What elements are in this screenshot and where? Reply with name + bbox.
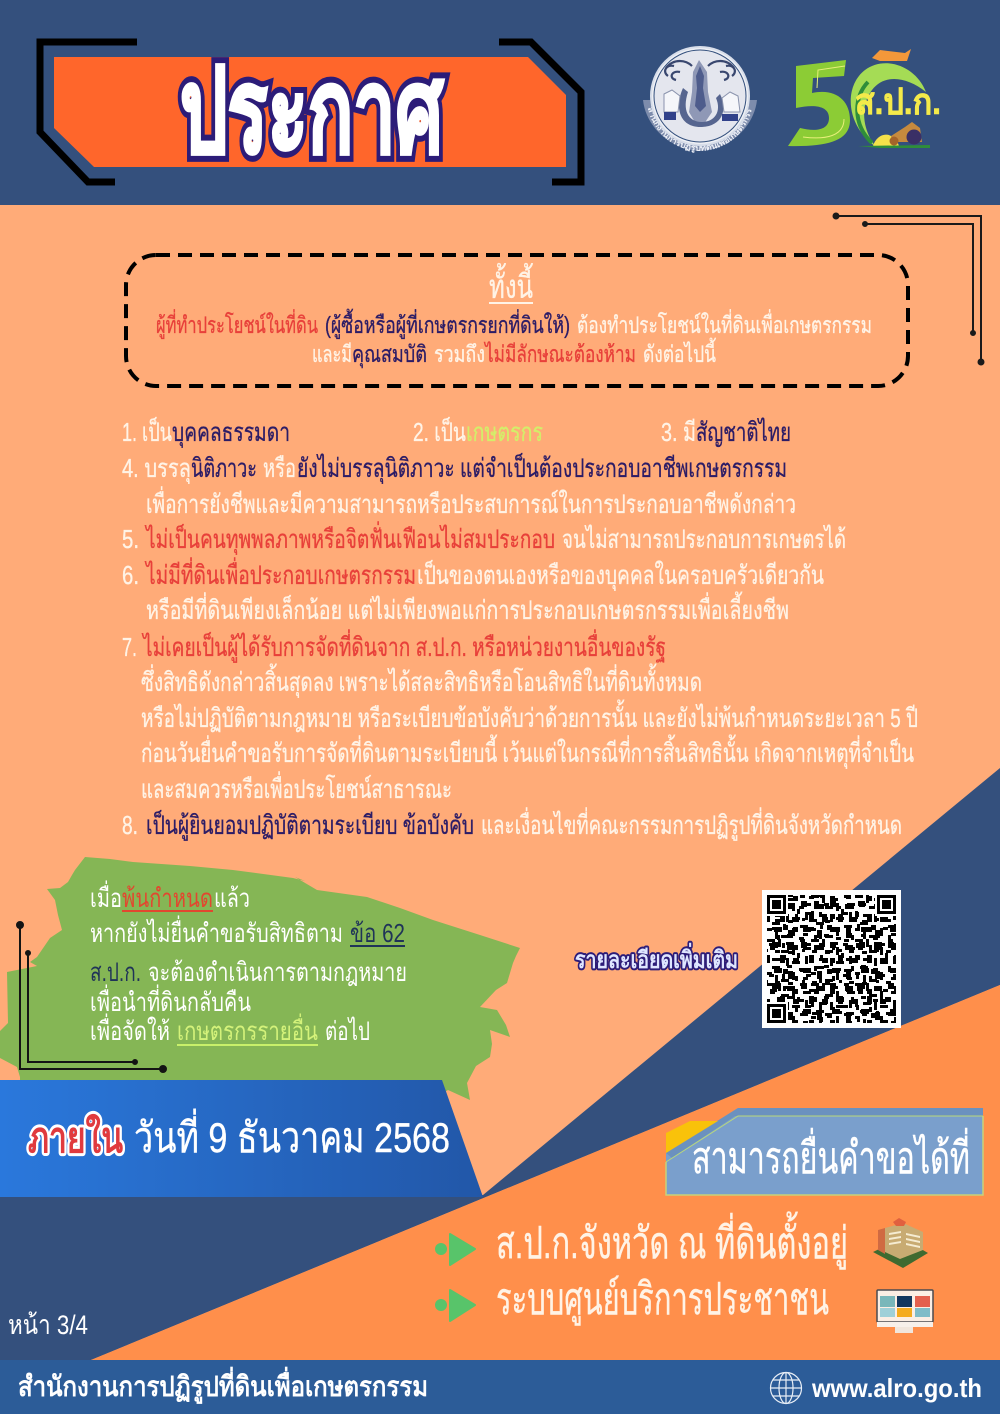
note line 3: จะต้องดำเนินการตามกฎหมาย — [148, 957, 407, 987]
note line 3: ส.ป.ก. — [90, 957, 141, 987]
heading: ทั้งนี้ — [489, 263, 534, 305]
title plate — [54, 57, 566, 167]
sun — [873, 135, 899, 146]
label: more details: รายละเอียดเพิ่มเติม — [575, 942, 738, 974]
panel: green brush note — [0, 857, 520, 1100]
note line 4: เพื่อนำที่ดินกลับคืน — [90, 984, 251, 1017]
tractor — [891, 122, 922, 142]
agency abbreviation: ส.ป.ก. — [855, 81, 941, 122]
grass — [858, 145, 930, 148]
decoration: corner lines top right — [833, 213, 984, 365]
notice line 1 — [156, 309, 872, 339]
crescent zero shade — [857, 82, 872, 143]
title bracket left — [40, 42, 137, 182]
note line 2: หากยังไม่ยื่นคำขอรับสิทธิตาม — [90, 915, 343, 948]
items 1 to 3: สัญชาติไทย — [696, 417, 791, 447]
deadline keyword: ภายใน — [28, 1113, 123, 1161]
item 5: จนไม่สามารถประกอบการเกษตรได้ — [562, 524, 846, 554]
item 6 — [122, 557, 824, 625]
finder squares — [765, 893, 788, 916]
item 7: และสมควรหรือเพื่อประโยชน์สาธารณะ — [141, 771, 452, 804]
panel: where to submit heading — [666, 1108, 983, 1195]
item 5: 5. — [122, 524, 139, 554]
panel: orange lower triangle — [91, 985, 1000, 1360]
icon: globe — [770, 1372, 802, 1404]
item 7: ซึ่งสิทธิดังกล่าวสิ้นสุดลง เพราะได้สละสิทธิหรือโอนสิทธิในที่ดินทั้งหมด — [141, 663, 702, 698]
notice line 2: และมี — [312, 341, 352, 367]
title: ประกาศ — [180, 46, 444, 178]
icon: ALRO seal — [643, 46, 757, 153]
notice line 2: รวมถึง — [434, 341, 485, 367]
text block: qualifications list — [122, 416, 918, 841]
digit five — [788, 60, 850, 146]
note line 2: ข้อ 62 — [350, 918, 405, 948]
item 6: 6. — [122, 560, 139, 590]
note line 3 — [90, 957, 407, 987]
title: ประกาศ — [180, 46, 444, 178]
items 1 to 3: เกษตรกร — [466, 417, 543, 447]
item 6: เป็นของตนเองหรือของบุคคลในครอบครัวเดียวกัน — [417, 559, 824, 591]
item 8: เป็นผู้ยินยอมปฏิบัติตามระเบียบ ข้อบังคับ — [146, 809, 474, 841]
page number: หน้า 3/4 — [8, 1310, 88, 1340]
notice line 2 — [312, 338, 716, 368]
item 6: ไม่มีที่ดินเพื่อประกอบเกษตรกรรม — [145, 557, 416, 590]
deadline date: วันที่ 9 ธันวาคม 2568 — [134, 1109, 450, 1161]
item 4: นิติภาวะ — [191, 453, 257, 483]
items 1 to 3: 3. มี — [661, 417, 696, 447]
items 1 to 3 — [122, 416, 791, 448]
icon: building — [873, 1218, 928, 1268]
note line 5: เพื่อจัดให้ — [90, 1013, 170, 1046]
corner lines — [17, 922, 166, 1072]
item 4: หรือ — [263, 453, 296, 483]
notice line 1: ต้องทำประโยชน์ในที่ดินเพื่อเกษตรกรรม — [577, 309, 872, 338]
option: public service centre: ระบบศูนย์บริการประชาชน — [496, 1275, 829, 1326]
item 4 — [122, 452, 796, 519]
website: www.alro.go.th — [811, 1373, 982, 1403]
panel: navy diagonal band — [0, 768, 1000, 1360]
panel: dashed notice box — [126, 255, 908, 386]
notice line 2: คุณสมบัติ — [352, 341, 427, 368]
crescent zero — [851, 63, 926, 147]
QR code — [762, 890, 901, 1028]
notice line 2: ดังต่อไปนี้ — [643, 338, 716, 367]
panel: footer — [0, 1360, 1000, 1414]
note line 5: ต่อไป — [325, 1016, 370, 1046]
items 1 to 3: บุคคลธรรมดา — [172, 417, 290, 448]
title — [180, 46, 444, 178]
item 7: 7. — [122, 632, 137, 662]
icon: 50 years logo — [788, 49, 941, 148]
option: provincial office: ส.ป.ก.จังหวัด ณ ที่ดินตั้งอยู่ — [496, 1211, 848, 1270]
note line 1: แล้ว — [214, 883, 250, 913]
item 7 — [122, 629, 918, 804]
agency name: สำนักงานการปฏิรูปที่ดินเพื่อเกษตรกรรม — [18, 1366, 428, 1404]
items 1 to 3: 1. เป็น — [122, 416, 172, 447]
panel: deadline banner — [0, 1080, 483, 1197]
item 8 — [122, 807, 902, 841]
notice line 1: ผู้ที่ทำประโยชน์ในที่ดิน — [156, 309, 318, 339]
item 5 — [122, 521, 846, 555]
items 1 to 3: 2. เป็น — [413, 416, 466, 447]
panel: header band — [0, 0, 1000, 205]
item 6: หรือมีที่ดินเพียงเล็กน้อย แต่ไม่เพียงพอแก่การประกอบเกษตรกรรมเพื่อเลี้ยงชีพ — [146, 591, 789, 625]
note line 1 — [90, 880, 250, 913]
item 8: 8. — [122, 810, 138, 840]
title bracket right — [499, 42, 581, 182]
note line 5: เกษตรกรรายอื่น — [177, 1013, 318, 1046]
icon: green arrow 1 — [435, 1234, 475, 1265]
item 5: ไม่เป็นคนทุพพลภาพหรือจิตฟั่นเฟือนไม่สมประกอบ — [145, 521, 555, 555]
flame — [872, 49, 911, 61]
item 7: ไม่เคยเป็นผู้ได้รับการจัดที่ดินจาก ส.ป.ก. หรือหน่วยงานอื่นของรัฐ — [142, 629, 666, 663]
icon: green arrow 2 — [435, 1290, 475, 1321]
notice line 1: (ผู้ซื้อหรือผู้ที่เกษตรกรยกที่ดินให้) — [325, 309, 570, 339]
note line 1: เมื่อ — [90, 880, 122, 913]
item 4: ยังไม่บรรลุนิติภาวะ แต่จำเป็นต้องประกอบอาชีพเกษตรกรรม — [297, 452, 787, 484]
notice line 2: ไม่มีลักษณะต้องห้าม — [484, 341, 636, 367]
icon: monitor — [877, 1290, 933, 1333]
note line 1: พ้นกำหนด — [122, 883, 213, 913]
item 4: 4. บรรลุ — [122, 453, 191, 484]
note line 5 — [90, 1013, 370, 1046]
